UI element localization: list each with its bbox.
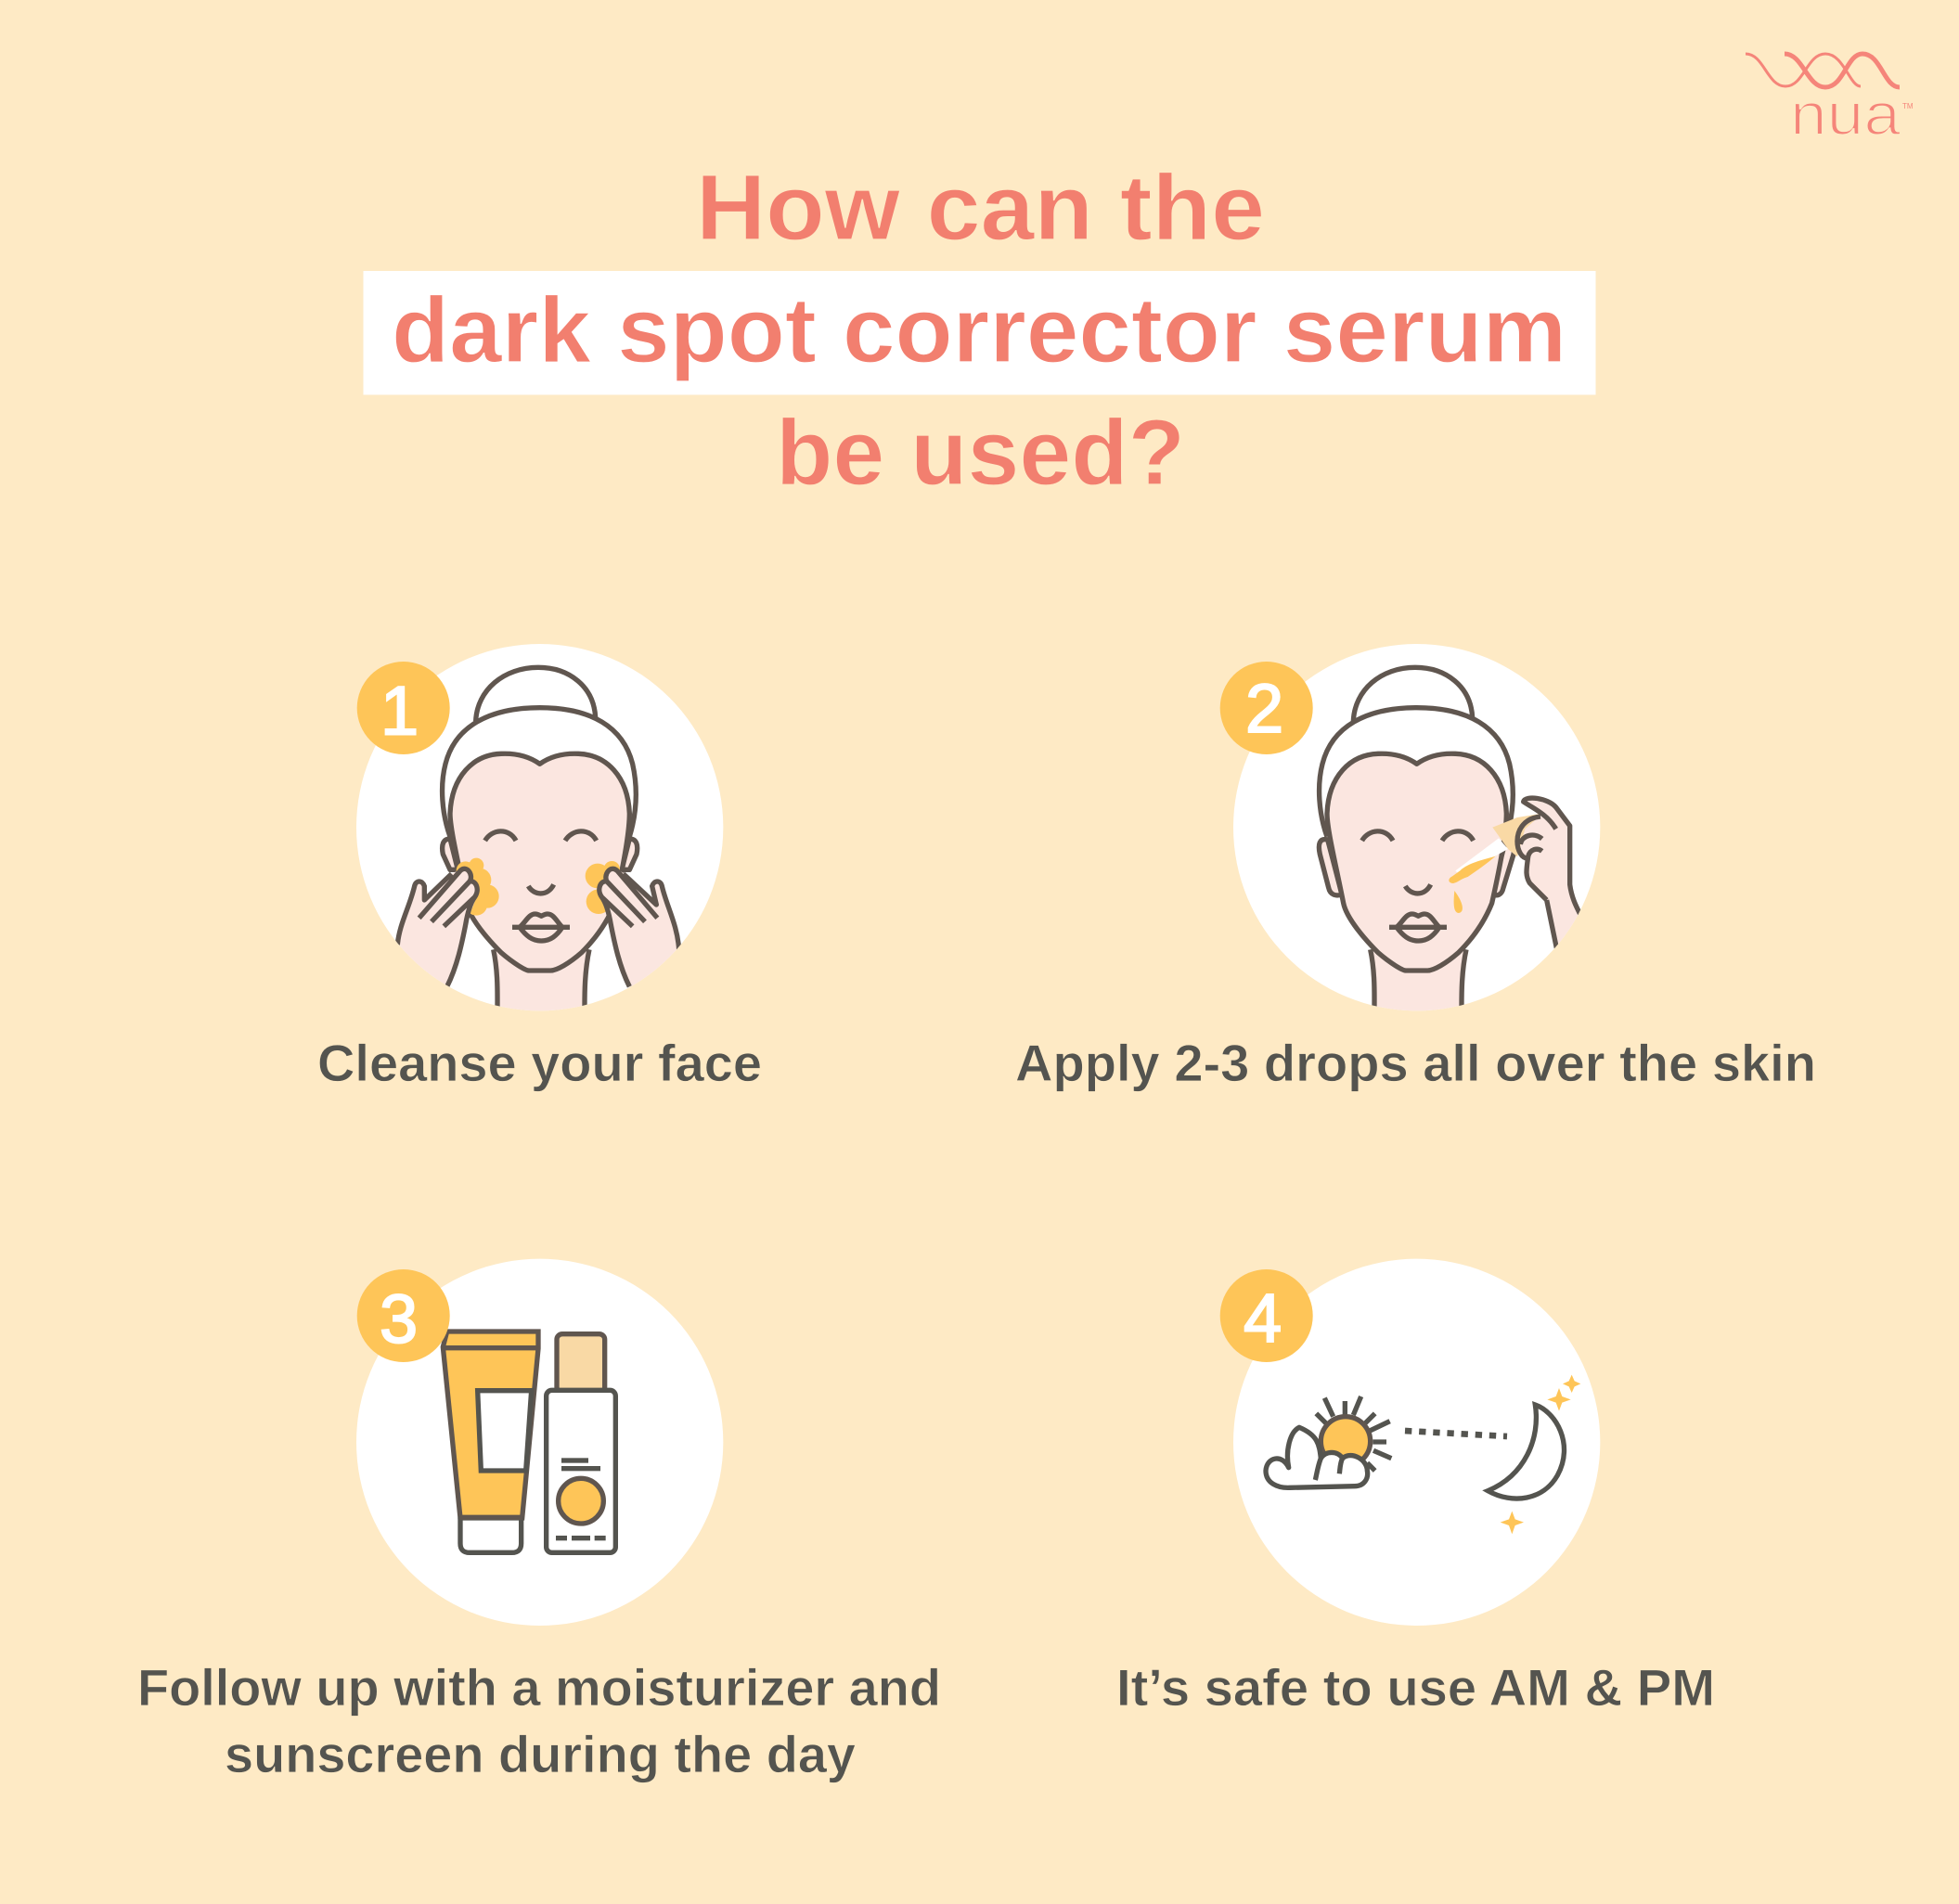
step 1 label: Cleanse your face [317, 1034, 762, 1092]
step 3 illustration: moisturizer and sunscreen [356, 1259, 723, 1626]
step 1 illustration: cleansing face [356, 644, 723, 1018]
step 3 label [137, 1658, 941, 1783]
step 3 panel [137, 1259, 941, 1783]
logo: nua: nua [1790, 81, 1901, 148]
moon [1488, 1405, 1565, 1499]
stars [1501, 1375, 1580, 1534]
number badge 3: 3 [380, 1280, 418, 1357]
step 1 panel [317, 644, 762, 1092]
step 3 label: sunscreen during the day [225, 1725, 856, 1783]
hand [1519, 800, 1578, 944]
sun [1316, 1396, 1391, 1471]
step 4 label: It’s safe to use AM & PM [1116, 1658, 1715, 1717]
ears [443, 839, 638, 869]
number badge 1 [357, 662, 450, 754]
hair [1320, 708, 1513, 837]
title: dark spot corrector serum [392, 278, 1566, 382]
neck [1373, 951, 1463, 1011]
title highlight box [364, 271, 1596, 395]
logo: nua [1746, 54, 1914, 148]
foam [457, 858, 620, 916]
step 2 illustration: applying drops [1233, 644, 1600, 1014]
step 4 panel [1116, 1259, 1715, 1717]
step 2 label: Apply 2-3 drops all over the skin [1015, 1034, 1816, 1092]
title: be used? [776, 401, 1185, 505]
neck [496, 951, 586, 1011]
facial features [1362, 831, 1474, 894]
number badge 3 [357, 1269, 450, 1362]
logo: nua: TM [1902, 102, 1914, 110]
dropper [1449, 814, 1542, 913]
cloud [1266, 1427, 1368, 1487]
face [450, 753, 629, 971]
number badge 4: 4 [1244, 1280, 1282, 1357]
dotted path [1405, 1431, 1507, 1436]
right hand [601, 871, 677, 987]
tube [443, 1332, 538, 1552]
ears [1319, 840, 1514, 895]
step 2 panel [1015, 644, 1816, 1092]
hair [443, 708, 636, 837]
number badge 2 [1220, 662, 1313, 754]
title [364, 156, 1596, 505]
number badge 4 [1220, 1269, 1313, 1362]
bottle [547, 1334, 615, 1552]
face [1327, 753, 1506, 971]
facial features [485, 831, 597, 894]
step 4 illustration: sun to moon [1233, 1259, 1600, 1626]
number badge 2: 2 [1245, 670, 1283, 747]
left hand [399, 871, 475, 984]
step 3 label: Follow up with a moisturizer and [137, 1658, 941, 1717]
bun [1353, 667, 1473, 721]
title: How can the [696, 156, 1265, 260]
bun [476, 667, 596, 721]
number badge 1: 1 [380, 672, 419, 750]
